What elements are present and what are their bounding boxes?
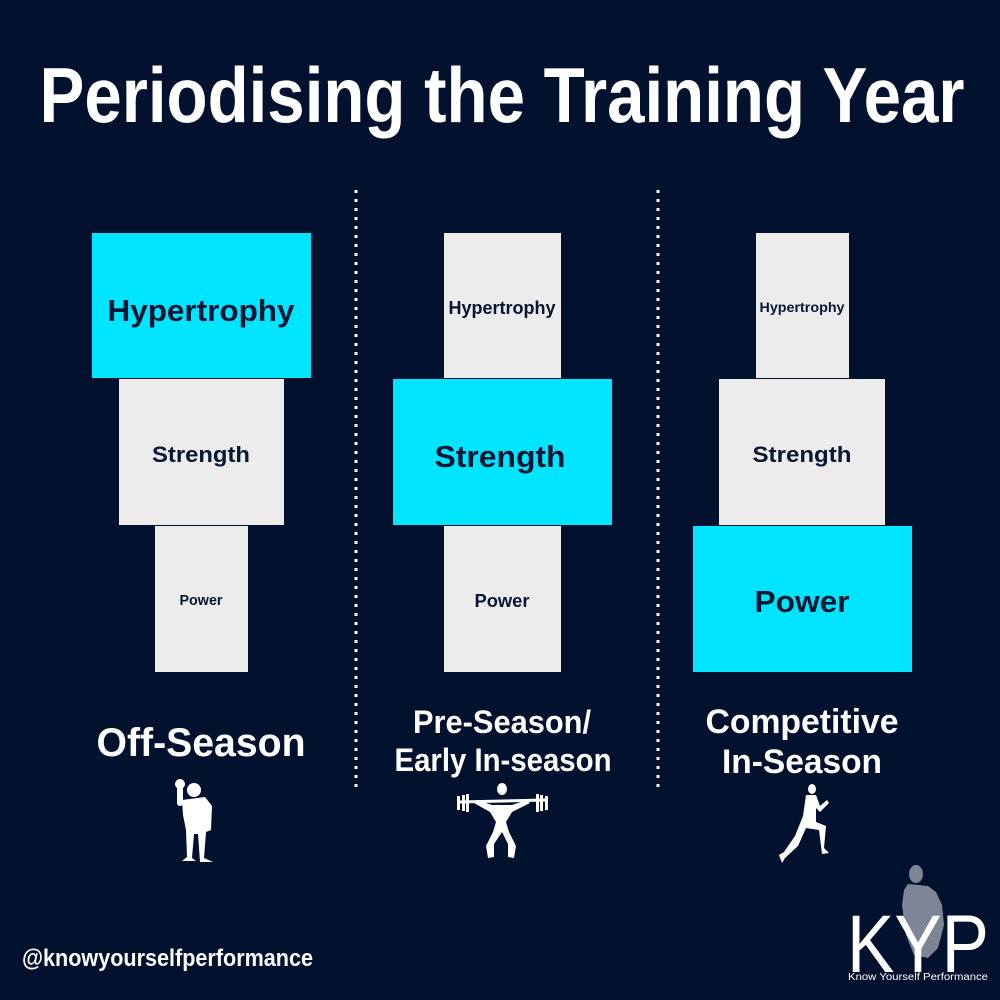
- footer: handle: @knowyourselfperformance: [22, 945, 313, 972]
- logo statue: [902, 865, 944, 958]
- logo: KYP: Know Yourself Performance: [848, 972, 988, 983]
- icon: bodybuilder: [175, 779, 213, 862]
- block: strength off-season: [119, 379, 284, 525]
- block: hypertrophy off-season: [92, 233, 311, 378]
- block: strength off-season: Strength: [152, 442, 250, 467]
- block: hypertrophy in-season: Hypertrophy: [760, 299, 845, 315]
- block: strength in-season: [719, 379, 885, 525]
- label: competitive in-season: [706, 703, 898, 781]
- icon: squat: [457, 783, 548, 858]
- block: hypertrophy in-season: [756, 233, 849, 378]
- block: power off-season: [155, 526, 248, 672]
- block: power in-season: Power: [754, 584, 850, 619]
- label: competitive in-season: In-Season: [722, 743, 882, 781]
- block: strength in-season: Strength: [752, 442, 852, 467]
- block: power in-season: [693, 526, 912, 672]
- block: hypertrophy off-season: Hypertrophy: [108, 293, 295, 328]
- label: competitive in-season: Competitive: [706, 703, 898, 741]
- logo: KYP: [847, 865, 989, 990]
- block: power pre-season: Power: [474, 591, 530, 611]
- label: pre-season: Early In-season: [394, 742, 612, 778]
- block: strength pre-season: [393, 379, 612, 525]
- panel: off-season: [92, 233, 311, 862]
- label: pre-season: Pre-Season/: [413, 704, 591, 740]
- block: hypertrophy pre-season: [444, 233, 561, 378]
- panel: pre-season: [393, 233, 612, 858]
- block: strength pre-season: Strength: [434, 439, 566, 474]
- block: power off-season: Power: [180, 592, 223, 609]
- panel: competitive in-season: [693, 233, 912, 863]
- label: off-season: Off-Season: [96, 721, 306, 765]
- block: hypertrophy pre-season: Hypertrophy: [448, 298, 556, 318]
- label: pre-season: [394, 704, 612, 778]
- block: power pre-season: [444, 526, 561, 672]
- icon: runner: [779, 784, 829, 863]
